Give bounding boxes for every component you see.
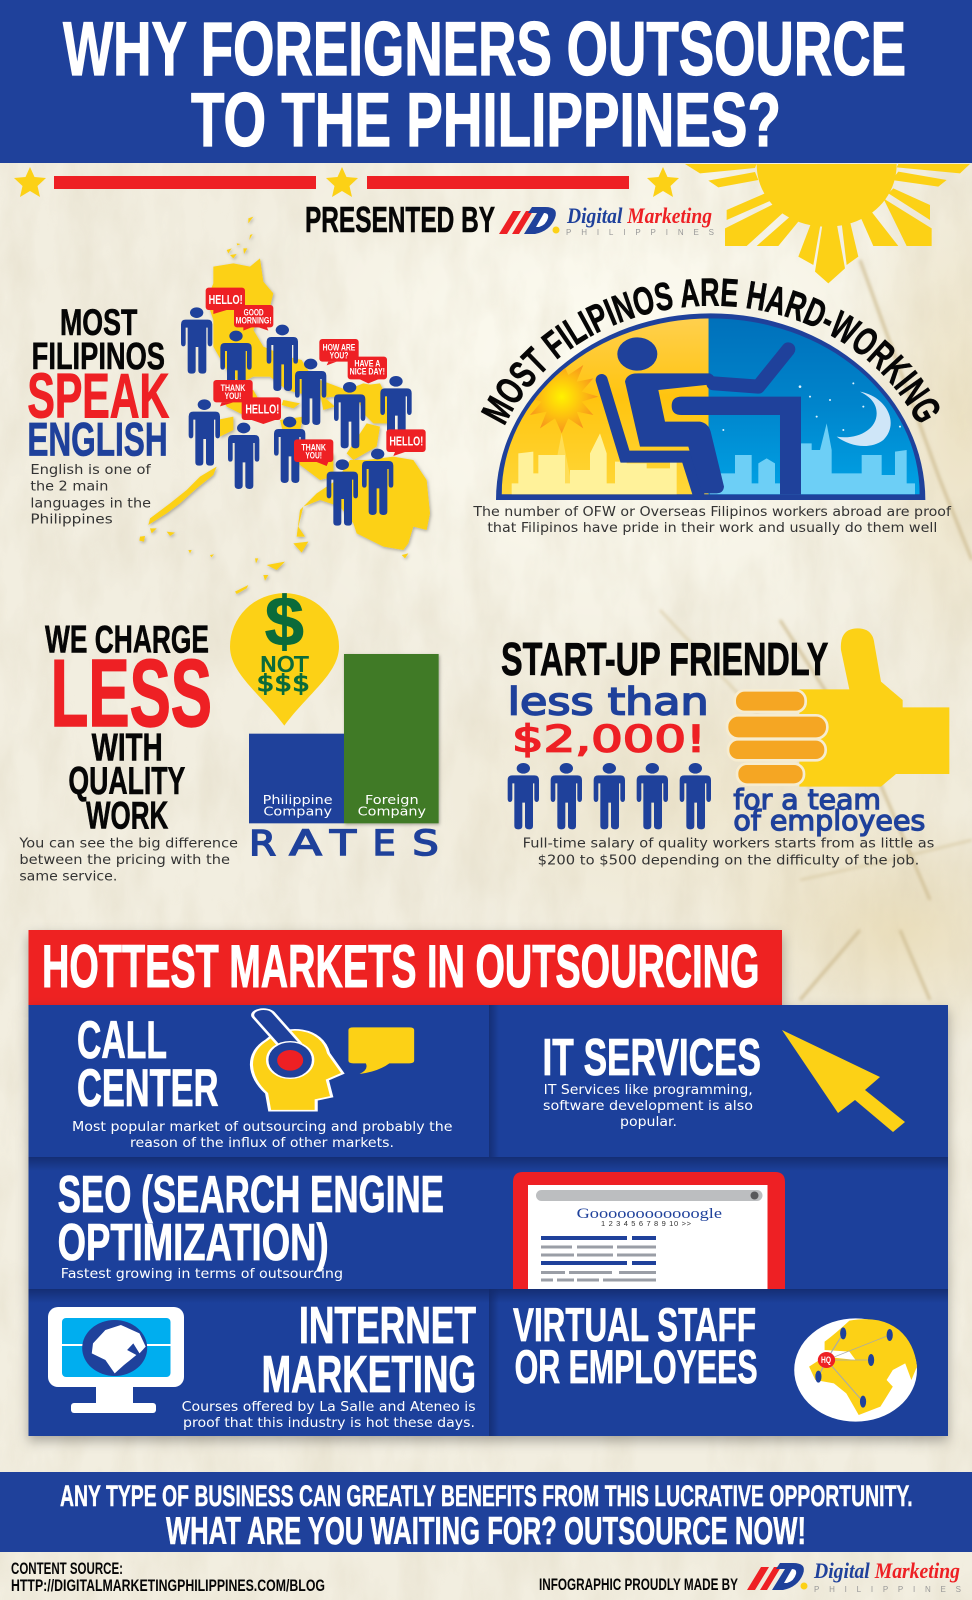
footer: made by: INFOGRAPHIC PROUDLY MADE BY — [539, 1576, 738, 1594]
foreign company bar: Company — [358, 804, 427, 819]
rates label — [249, 824, 439, 864]
worker at desk — [602, 337, 801, 494]
rates label: E — [373, 824, 396, 864]
description — [30, 462, 152, 527]
speech bubbles: YOU! — [305, 451, 322, 461]
icon: staff globe — [794, 1318, 917, 1422]
heading: WORK — [86, 794, 168, 837]
heading: LESS — [51, 640, 212, 747]
for a team of employees: of employees — [733, 804, 925, 837]
description — [523, 835, 934, 868]
hard-working section — [472, 278, 952, 536]
footer: content source: HTTP://DIGITALMARKETINGPHILIPPINES.COM/BLOG — [11, 1577, 325, 1595]
description: The number of OFW or Overseas Filipinos workers abroad are proof — [472, 504, 952, 520]
description: between the pricing with the — [19, 852, 230, 868]
footer: content source — [11, 1560, 325, 1595]
night stars — [722, 382, 901, 431]
description: $200 to $500 depending on the difficulty of the job. — [538, 852, 919, 868]
header band — [0, 0, 972, 163]
market: internet marketing: Courses offered by La Salle and Ateneo is — [182, 1399, 476, 1415]
description: that Filipinos have pride in their work and usually do them well — [487, 520, 937, 536]
icon: search results browser — [513, 1172, 785, 1289]
description: the 2 main — [30, 479, 108, 495]
heading: WE CHARGE — [45, 619, 209, 662]
speech bubbles — [206, 288, 426, 466]
heading — [27, 301, 169, 466]
call to action band — [0, 1472, 972, 1553]
market: SEO: Fastest growing in terms of outsourcing — [61, 1266, 343, 1282]
speech bubbles: HELLO! — [245, 402, 279, 416]
market: virtual staff — [513, 1298, 917, 1422]
foreign company bar — [344, 654, 439, 823]
rates label: R — [249, 824, 276, 864]
presented by — [305, 199, 714, 240]
market: call center: CENTER — [77, 1059, 218, 1118]
icon: staff globe: HQ — [821, 1355, 831, 1365]
speech bubbles: MORNING! — [236, 316, 272, 326]
markets panel — [28, 1005, 948, 1436]
heading — [45, 619, 212, 837]
Philippine company bar — [249, 734, 344, 823]
logo: Digital Marketing Philippines: Digital Marketing — [813, 1558, 960, 1583]
sun — [685, 164, 970, 283]
heading: WITH — [92, 727, 163, 770]
pin: dollars not dollars: NOT — [260, 653, 309, 677]
speech bubbles: HOW ARE — [323, 342, 355, 352]
curved heading: MOST FILIPINOS ARE HARD-WORKING — [480, 278, 940, 426]
logo: Digital Marketing Philippines: Digital Marketing — [566, 203, 712, 228]
icon: thumbs up — [727, 628, 949, 787]
logo: Digital Marketing Philippines: PHILIPPINES — [814, 1585, 961, 1594]
heading: START-UP FRIENDLY — [501, 633, 828, 685]
icon: search results browser: Goooooooooooogle — [577, 1206, 722, 1222]
logo: Digital Marketing Philippines — [747, 1558, 961, 1594]
speech bubbles: HAVE A — [354, 359, 381, 369]
pin: dollars not dollars: $ — [265, 583, 304, 661]
pin: dollars not dollars: $$$ — [257, 671, 310, 697]
market: call center: Most popular market of outsourcing and probably the — [72, 1119, 452, 1135]
market: virtual staff: OR EMPLOYEES — [515, 1340, 758, 1393]
market: SEO: OPTIMIZATION) — [58, 1214, 329, 1272]
description: You can see the big difference — [18, 835, 238, 851]
market: call center — [72, 1011, 452, 1151]
icon: cursor arrow — [782, 1030, 905, 1132]
market: IT services: software development is also — [543, 1098, 753, 1114]
description: Philippines — [30, 511, 113, 527]
people on the map — [181, 307, 412, 526]
heading: ENGLISH — [27, 413, 168, 466]
speech bubbles: YOU! — [225, 391, 241, 401]
title — [63, 7, 906, 163]
market: internet marketing: MARKETING — [262, 1346, 476, 1404]
description: Full-time salary of quality workers starts from as little as — [523, 835, 934, 851]
start-up section — [501, 628, 949, 868]
speech bubbles: NICE DAY! — [350, 367, 385, 377]
description: English is one of — [30, 462, 152, 478]
logo: Digital Marketing Philippines: PHILIPPINES — [566, 228, 714, 237]
description: same service. — [19, 869, 117, 885]
price: $2,000! — [512, 718, 706, 761]
market: call center: reason of the influx of other markets. — [130, 1135, 394, 1151]
speech bubbles: HELLO! — [209, 293, 243, 307]
five employees — [508, 763, 711, 829]
heading: QUALITY — [68, 760, 185, 803]
market: call center: CALL — [77, 1011, 167, 1070]
description: languages in the — [30, 495, 151, 511]
footer: made by — [539, 1558, 961, 1594]
day and night illustration — [496, 313, 925, 500]
icon: globe monitor — [48, 1307, 184, 1413]
footer: content source: CONTENT SOURCE: — [11, 1560, 123, 1578]
foreign company bar: Foreign — [365, 792, 419, 807]
icon: search results browser: 1 2 3 4 5 6 7 8 9 10 >> — [601, 1219, 692, 1228]
speech bubbles: THANK — [301, 443, 326, 453]
for a team of employees — [733, 783, 925, 837]
pin: dollars not dollars — [230, 583, 339, 726]
for a team of employees: for a team — [733, 783, 881, 816]
market: internet marketing: proof that this industry is hot these days. — [183, 1415, 475, 1431]
bar chart — [249, 654, 439, 864]
market: internet marketing: INTERNET — [299, 1297, 476, 1355]
market: IT services: IT Services like programming, — [544, 1082, 753, 1098]
less than: less than — [508, 679, 709, 723]
market: internet marketing — [48, 1297, 476, 1431]
Philippine company bar: Philippine — [263, 792, 333, 807]
market: virtual staff: VIRTUAL STAFF — [513, 1298, 756, 1351]
description — [472, 504, 952, 536]
map section: speak English — [27, 217, 430, 594]
presented by: PRESENTED BY — [305, 199, 495, 240]
Philippine company bar: Company — [263, 804, 333, 819]
speech bubbles: GOOD — [244, 307, 264, 317]
heading: SPEAK — [27, 361, 169, 431]
market: SEO: SEO (SEARCH ENGINE — [58, 1166, 444, 1224]
rates section — [18, 583, 439, 885]
icon: headset head — [251, 1015, 414, 1111]
market: IT services: popular. — [620, 1114, 677, 1130]
heading: FILIPINOS — [32, 336, 165, 378]
speech bubbles: HELLO! — [389, 434, 423, 448]
description — [18, 835, 238, 885]
rates label: A — [289, 824, 322, 864]
day skyline — [512, 433, 677, 494]
heading: MOST — [60, 301, 137, 343]
market: SEO — [58, 1166, 785, 1289]
speech bubbles: THANK — [221, 383, 246, 393]
logo: Digital Marketing Philippines — [499, 203, 714, 237]
map of the Philippines — [139, 217, 430, 594]
speech bubbles: YOU? — [330, 350, 349, 360]
night skyline — [710, 423, 915, 494]
sun burst — [530, 365, 598, 434]
rates label: T — [329, 824, 357, 864]
moon — [837, 392, 891, 446]
rates label: S — [412, 824, 439, 864]
market: IT services: IT SERVICES — [542, 1029, 761, 1087]
market: IT services — [542, 1029, 905, 1132]
stars and red bars — [14, 167, 679, 197]
